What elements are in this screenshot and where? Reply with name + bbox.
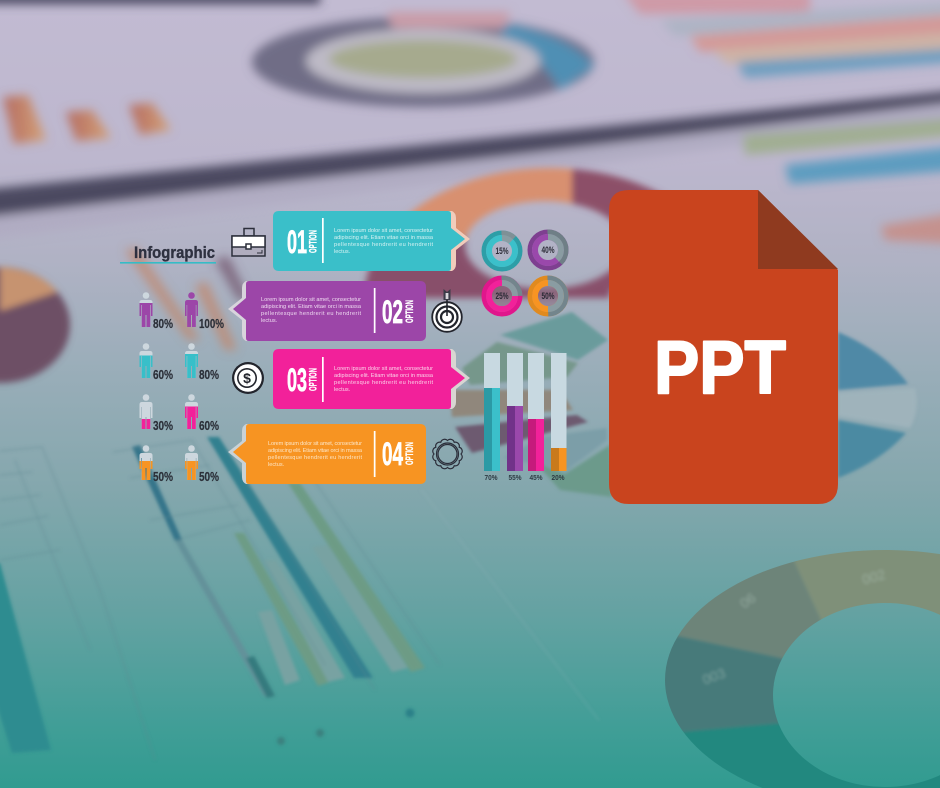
panel: option 02: 02 bbox=[382, 294, 403, 330]
icon: dollar coin: $ bbox=[243, 370, 251, 386]
donut 15%: 15% bbox=[496, 246, 508, 256]
panel: option 01: 01 bbox=[287, 224, 307, 260]
icon: PPT file bbox=[609, 190, 838, 504]
panel: option 02: adipiscing elit. Etiam vitae orci in massa bbox=[261, 304, 362, 310]
person 50% orange right: 50% bbox=[199, 469, 219, 484]
donut 25%: 25% bbox=[496, 291, 508, 301]
panel: option 01: Lorem ipsum dolor sit amet, consectetur bbox=[334, 228, 433, 234]
panel: option 04: pellentesque hendrerit eu hendrerit bbox=[268, 455, 362, 461]
panel: option 01: pellentesque hendrerit eu hendrerit bbox=[334, 242, 433, 248]
panel: option 03: Lorem ipsum dolor sit amet, consectetur bbox=[334, 366, 433, 372]
panel: option 02: OPTION bbox=[404, 300, 416, 323]
panel: option 02: Lorem ipsum dolor sit amet, consectetur bbox=[261, 297, 361, 303]
blurred donut labels: 06 bbox=[737, 589, 759, 611]
panel: option 03: 03 bbox=[287, 362, 307, 398]
panel: option 04: lectus. bbox=[268, 462, 285, 468]
bar 55%: 55% bbox=[508, 475, 522, 482]
donut charts bbox=[484, 232, 566, 314]
bar 20%: 20% bbox=[552, 475, 565, 482]
icon: gear bbox=[433, 439, 462, 469]
panel: option 03: lectus. bbox=[334, 387, 351, 393]
donut 40%: 40% bbox=[542, 245, 554, 255]
panel: option 01: lectus. bbox=[334, 249, 351, 255]
panel: option 03: pellentesque hendrerit eu hendrerit bbox=[334, 380, 433, 386]
person 80% purple: 80% bbox=[153, 316, 173, 331]
panel: option 03 bbox=[273, 349, 470, 409]
icon: target with arrow bbox=[432, 289, 462, 332]
bar chart bbox=[484, 353, 566, 482]
panel: option 04: OPTION bbox=[404, 442, 416, 465]
icon: PPT file: PPT bbox=[654, 325, 786, 409]
person 50% orange right bbox=[185, 445, 219, 484]
panel: option 04: adipiscing elit. Etiam vitae orci in massa bbox=[268, 448, 363, 454]
person 80% teal bbox=[185, 343, 219, 382]
person 60% pink bbox=[185, 394, 219, 433]
person 60% pink: 60% bbox=[199, 418, 219, 433]
heading: Infographic: Infographic bbox=[134, 244, 215, 262]
icon: dollar coin bbox=[232, 362, 264, 394]
panel: option 02: pellentesque hendrerit eu hendrerit bbox=[261, 311, 361, 317]
donut 50%: 50% bbox=[542, 291, 554, 301]
person 60% teal: 60% bbox=[153, 367, 173, 382]
panel: option 01: adipiscing elit. Etiam vitae orci in massa bbox=[334, 235, 434, 241]
icon: briefcase bbox=[232, 228, 265, 256]
blurred donut labels: 003 bbox=[700, 665, 728, 688]
bar 45%: 45% bbox=[530, 475, 543, 482]
person 50% orange: 50% bbox=[153, 469, 173, 484]
panel: option 03: adipiscing elit. Etiam vitae orci in massa bbox=[334, 373, 434, 379]
person 50% orange bbox=[140, 445, 173, 484]
panel: option 01 bbox=[273, 211, 470, 271]
panel: option 04: 04 bbox=[382, 436, 403, 472]
panel: option 04: Lorem ipsum dolor sit amet, consectetur bbox=[268, 441, 362, 447]
person 30% pink: 30% bbox=[153, 418, 173, 433]
panel: option 03: OPTION bbox=[308, 368, 320, 391]
person 80% teal: 80% bbox=[199, 367, 219, 382]
blurred donut labels bbox=[700, 566, 887, 688]
person 100% purple bbox=[185, 292, 224, 331]
person 60% teal bbox=[140, 343, 173, 382]
person 30% pink bbox=[140, 394, 173, 433]
person 100% purple: 100% bbox=[199, 316, 224, 331]
people pictogram percentages bbox=[140, 292, 224, 484]
blurred donut labels: 002 bbox=[860, 566, 887, 588]
panel: option 04 bbox=[228, 424, 426, 484]
bar 70%: 70% bbox=[484, 475, 498, 482]
panel: option 02: lectus. bbox=[261, 318, 278, 324]
panel: option 02 bbox=[228, 281, 426, 341]
person 80% purple bbox=[140, 292, 173, 331]
panel: option 01: OPTION bbox=[308, 230, 320, 253]
